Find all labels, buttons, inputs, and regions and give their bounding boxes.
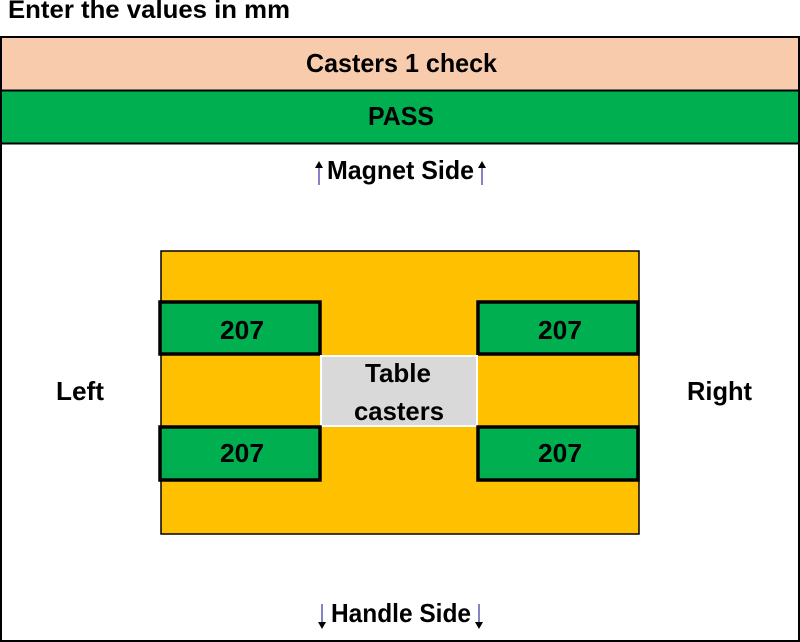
status band: pass: PASS [368, 101, 434, 131]
caster: bottom right [478, 427, 638, 480]
caster: top left: 207 [220, 315, 264, 345]
heading: casters check: Casters 1 check [306, 48, 498, 78]
caster: bottom left: 207 [220, 438, 264, 468]
caster: top right: 207 [538, 315, 582, 345]
caster: top left [160, 302, 320, 354]
table surface [161, 251, 639, 534]
caster: bottom left [160, 427, 320, 480]
centre label: table casters [321, 356, 477, 426]
centre label: table casters: Table [365, 358, 431, 388]
centre label: table casters: casters [354, 396, 444, 426]
label: magnet side: Magnet Side [327, 155, 474, 185]
label: handle side: Handle Side [331, 598, 471, 628]
label: right: Right [687, 376, 752, 406]
status band: pass [2, 90, 798, 144]
label: left: Left [56, 376, 104, 406]
caster: bottom right: 207 [538, 438, 582, 468]
heading: casters check [2, 38, 798, 90]
caster: top right [478, 302, 638, 354]
table diagram [160, 251, 639, 534]
